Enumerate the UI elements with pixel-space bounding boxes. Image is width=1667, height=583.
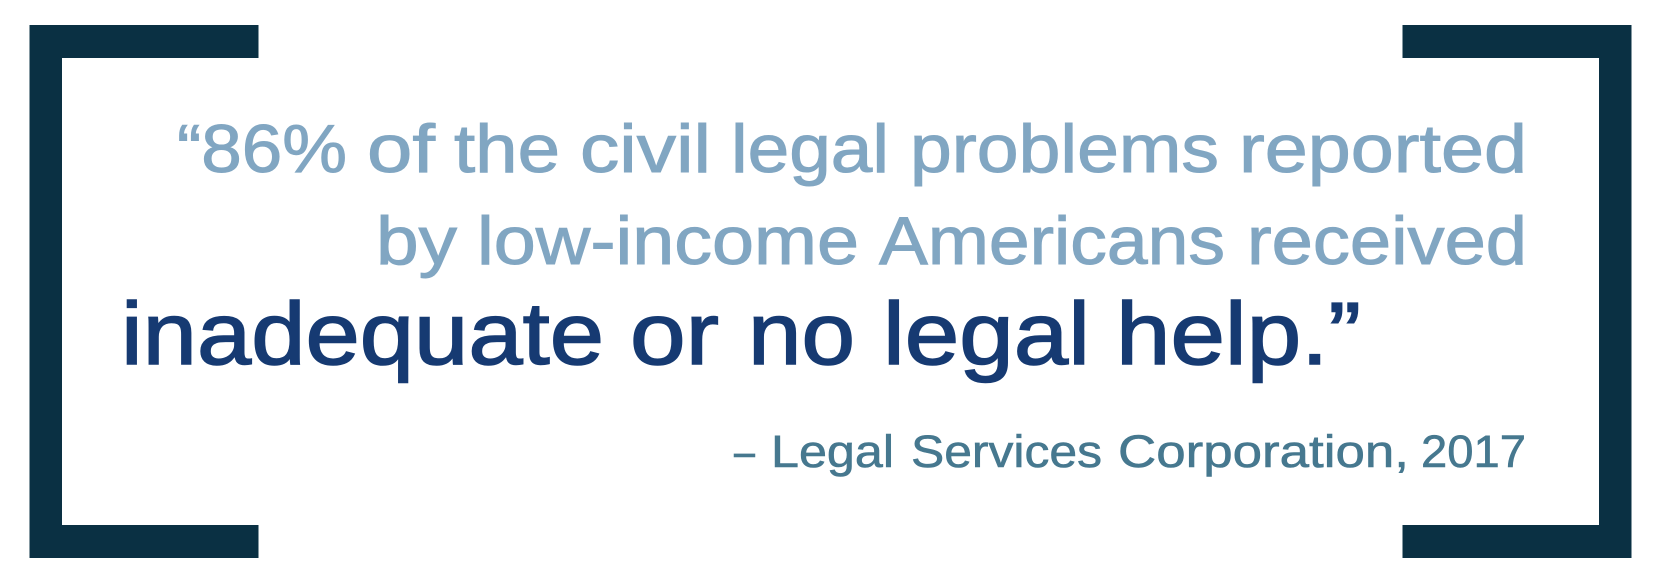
attribution: Legal [771,426,894,477]
attribution: Corporation, [1118,426,1409,477]
left bracket [30,25,258,558]
quote emphasis line: legal [883,284,1090,383]
quote line 1: reported [1239,111,1527,187]
quote line 2 [376,203,1527,279]
attribution [734,426,1526,477]
quote line 1: problems [910,111,1219,187]
quote emphasis line [121,284,1361,383]
quote emphasis line: inadequate [121,284,604,383]
quote line 2: Americans [879,203,1225,279]
quote line 1: legal [731,111,889,187]
quote line 1: of [367,111,435,187]
quote line 1: “86% [177,111,347,187]
quote emphasis line: or [630,284,719,383]
quote text [121,111,1527,383]
attribution: 2017 [1421,426,1526,477]
quote line 2: low-income [477,203,859,279]
quote line 1: civil [580,111,711,187]
right bracket [1402,25,1632,558]
quote line 2: received [1247,203,1527,279]
quote emphasis line: help.” [1116,284,1361,383]
quote line 1 [177,111,1527,187]
attribution: – [734,426,755,477]
quote line 2: by [376,203,457,279]
attribution: Services [911,426,1102,477]
quote emphasis line: no [748,284,855,383]
quote line 1: the [454,111,560,187]
